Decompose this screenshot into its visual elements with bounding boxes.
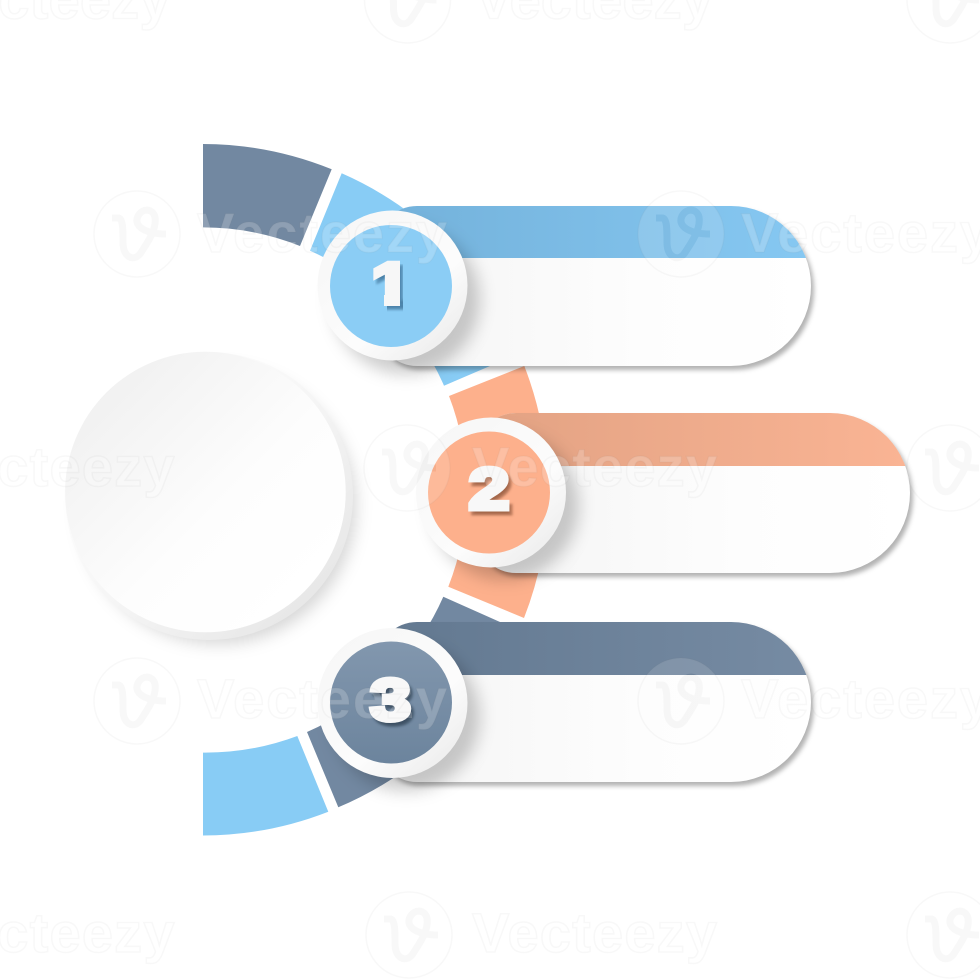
watermark row 3	[428, 448, 716, 504]
number 2: 2	[469, 457, 509, 521]
watermark row 1	[0, 0, 980, 43]
watermark row 2: Vecteezy	[197, 201, 447, 264]
arc segment: top dark	[203, 144, 332, 246]
number badge 1: 1	[375, 255, 413, 320]
number badge 3: 3	[373, 672, 414, 736]
arc segment: blue	[310, 173, 520, 386]
card 1 body	[377, 206, 811, 366]
card 2 body	[476, 413, 910, 573]
arc segment: lower dark	[307, 597, 519, 807]
centre circle	[65, 352, 356, 644]
card 2	[476, 413, 913, 577]
number badge 2	[416, 418, 579, 580]
watermark row 3: Vecteezy	[472, 435, 717, 498]
card 3 body	[377, 622, 811, 782]
infographic canvas	[65, 144, 918, 836]
card 2 header	[497, 413, 906, 466]
card 1 header	[398, 206, 806, 258]
number badge 1	[318, 210, 480, 374]
number 3: 3	[370, 668, 411, 732]
segmented arc	[203, 144, 548, 836]
watermark row 4: Vecteezy	[197, 667, 447, 730]
arc segment: bottom blue	[203, 736, 328, 836]
card 1	[377, 206, 814, 370]
watermark row 5: Vecteezy	[472, 901, 717, 964]
number 1: 1	[372, 251, 410, 316]
watermark	[203, 206, 802, 730]
card 3 header	[396, 622, 806, 675]
watermark row 4	[330, 658, 715, 730]
arc segment: orange	[448, 366, 548, 618]
number badge 2: 2	[472, 461, 512, 525]
watermark row 5	[0, 892, 980, 978]
card 3	[377, 622, 814, 786]
number badge 3	[318, 628, 480, 791]
watermark row 2	[203, 206, 802, 264]
